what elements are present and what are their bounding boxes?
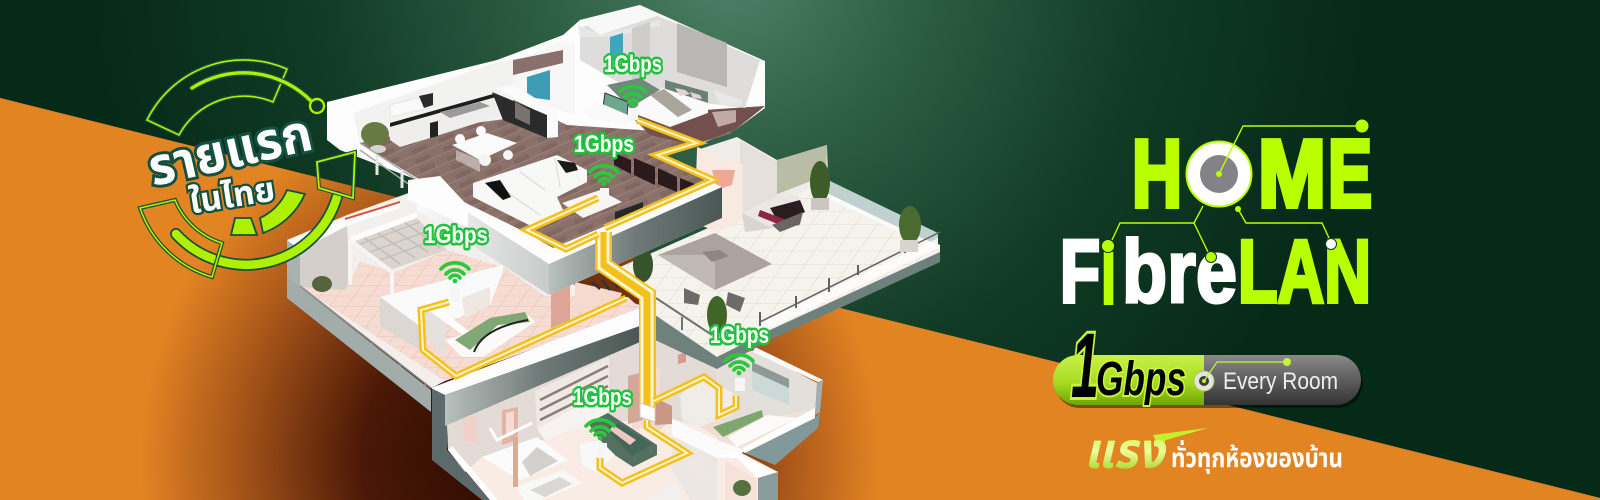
slogan word strong: แรง: [1084, 423, 1167, 479]
bed with gray blanket: [665, 80, 708, 103]
patio chairs: [684, 288, 700, 305]
badge text line 2: ในไทย: [187, 170, 278, 221]
slogan: [1084, 423, 1343, 479]
title: HOME FibreLAN: [1060, 120, 1372, 321]
circuit lines and nodes: [1112, 126, 1358, 252]
bedroom divider and counter: [380, 265, 503, 340]
title word HOME: [1132, 120, 1372, 228]
wood floor: [360, 90, 733, 248]
wifi access point 5: [573, 384, 632, 458]
big 1: 1: [1071, 315, 1099, 417]
pink tiled floor: [300, 250, 640, 381]
middle floor: [287, 190, 640, 412]
badge lower ring: [176, 197, 337, 265]
coffee table: [562, 190, 622, 218]
top floor: [327, 5, 765, 295]
wifi access point 2: 1Gbps: [574, 131, 634, 158]
wifi access point 3: 1Gbps: [424, 222, 488, 249]
title word FibreLAN: ı: [1102, 221, 1115, 321]
fibre lines: [421, 120, 736, 483]
glass rail top: [360, 143, 417, 190]
pill right grey half: [1204, 355, 1361, 405]
railing: [300, 286, 431, 398]
badge wedges: [231, 190, 305, 235]
wifi access point 3: [424, 222, 488, 302]
pill shadow: [1055, 358, 1363, 408]
kitchen back wall: [353, 60, 513, 143]
lower slab between floors: [431, 308, 640, 426]
curtain kitchen: [513, 50, 563, 75]
right bedroom window: [752, 370, 789, 405]
grill: [742, 192, 800, 232]
title word FibreLAN: F: [1060, 221, 1100, 321]
kitchen upper cabinet: [390, 95, 430, 117]
bedroom tv: [603, 93, 628, 117]
wardrobe wall: [350, 218, 447, 270]
slogan rest: ทั่วทุกห้องของบ้าน: [1171, 440, 1343, 474]
title word HOME: H: [1132, 120, 1182, 228]
bedroom floor: [630, 106, 765, 145]
kitchen counter: [390, 94, 496, 127]
right bed: [728, 415, 797, 447]
badge lower-left box: [140, 200, 222, 277]
house illustration: [287, 5, 940, 500]
glass railing: [827, 180, 938, 245]
wifi access point 5: 1Gbps: [573, 384, 632, 411]
white sofa: [473, 155, 587, 227]
wifi access point 1: [604, 51, 662, 120]
coffee table: [580, 440, 615, 472]
door and wall art: [630, 368, 660, 432]
title word HOME: M: [1258, 120, 1326, 228]
pill left lime half: [1053, 355, 1204, 405]
wine shelves: [614, 153, 631, 174]
wifi access point 2: [574, 131, 634, 200]
right bedroom floor base: [717, 350, 817, 453]
back wall: [695, 137, 828, 213]
badge: first in Thailand: [140, 60, 355, 277]
door frames: [350, 240, 392, 296]
Every Room: Every Room: [1223, 368, 1338, 395]
umbrella: [658, 233, 772, 290]
title word FibreLAN: LAN: [1238, 221, 1371, 321]
bed: [445, 315, 535, 357]
wing walls and gray exterior: [745, 412, 820, 465]
title word FibreLAN: [1060, 221, 1371, 321]
wifi access point 1: 1Gbps: [604, 51, 662, 78]
green sofa: [588, 413, 657, 467]
slogan swoosh: [1153, 428, 1208, 449]
badge text line 1: รายแรก: [143, 104, 318, 198]
title word FibreLAN: bre: [1122, 221, 1237, 321]
dining table: [452, 133, 517, 160]
window kitchen: [527, 70, 550, 100]
curtain and window bedroom: [610, 33, 623, 62]
target connector: [1194, 358, 1291, 391]
closet pink: [551, 285, 570, 328]
plant lower right: [733, 480, 751, 496]
badge right box: [317, 152, 355, 198]
white box bottom: [647, 483, 680, 500]
bedroom wall: [580, 8, 760, 108]
plants on terrace: [810, 161, 830, 203]
right bedroom cabinets: [680, 377, 733, 427]
badge top arc with ring: [192, 73, 324, 113]
wifi access point 4: 1Gbps: [710, 322, 769, 349]
Gbps: Gbps: [1096, 353, 1186, 406]
pill: 1Gbps Every Room: [1053, 315, 1363, 417]
O as fibre cable cross-section: [1186, 142, 1252, 206]
badge top outline segment: [147, 60, 287, 135]
title word HOME: E: [1328, 120, 1372, 228]
wall mounted tv: [615, 202, 643, 220]
right bedroom back wall: [717, 352, 817, 425]
slab side faces: [417, 180, 549, 295]
shelves: [535, 357, 609, 429]
wifi access point 4: [710, 322, 769, 391]
lower floor: [432, 335, 823, 500]
dark cabinets: [492, 92, 547, 138]
plant top: [361, 122, 389, 146]
bath: [482, 437, 568, 480]
terrace: [620, 137, 940, 369]
plant left: [312, 276, 332, 292]
central fibre switch: [640, 403, 655, 422]
